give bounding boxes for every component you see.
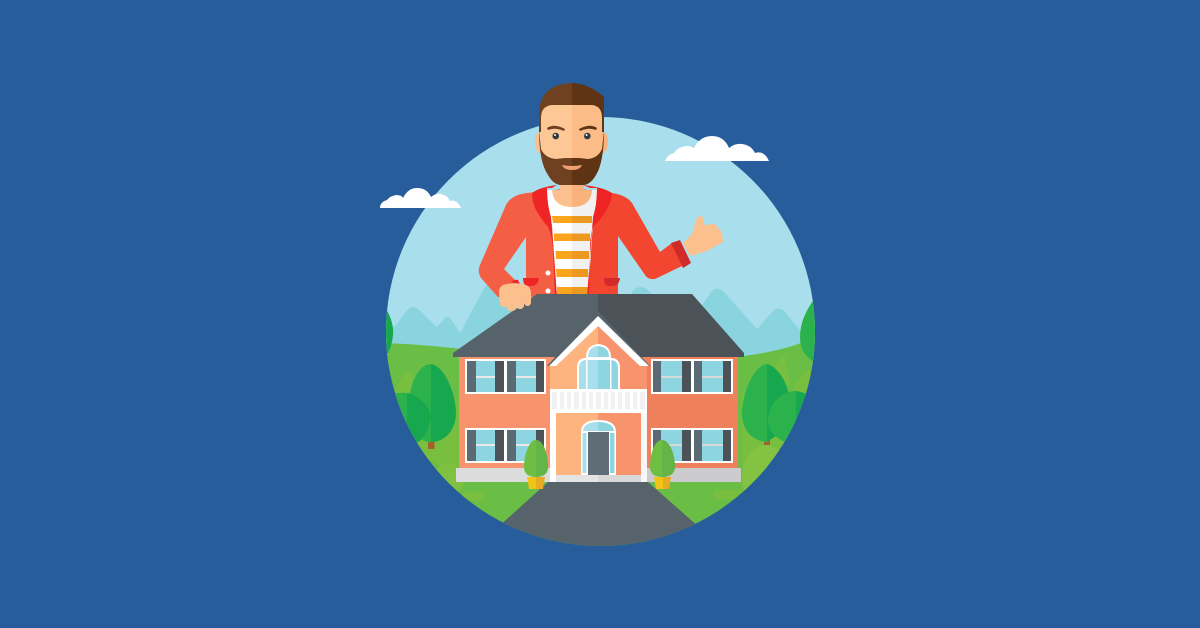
- person: [479, 132, 723, 297]
- eaves: [453, 353, 598, 357]
- house: [453, 294, 744, 489]
- hair: [539, 83, 572, 132]
- right edge tree: [800, 298, 815, 362]
- central gable outline: [547, 311, 650, 366]
- cloud right: [665, 136, 769, 161]
- hood left: [532, 185, 557, 297]
- pockets: [523, 278, 539, 286]
- eyebrows: [547, 126, 565, 131]
- foundation: [456, 468, 598, 482]
- mouth: [562, 165, 582, 170]
- thumbs up hand: [683, 216, 723, 256]
- shirt stripes: [552, 216, 592, 295]
- neck: [552, 180, 572, 207]
- windows left upper: [465, 359, 546, 394]
- beard: [539, 130, 572, 185]
- illustration: homeowner giving thumbs up above his house: [380, 83, 815, 546]
- ears: [535, 132, 541, 154]
- sky: [380, 110, 820, 360]
- hood right: [583, 185, 612, 297]
- left hand on roof: [499, 283, 531, 311]
- eyes: [552, 133, 559, 139]
- roof: [453, 294, 598, 353]
- ground: [380, 335, 820, 560]
- driveway: [503, 482, 696, 546]
- ground light patches: [380, 355, 815, 501]
- walls: [459, 357, 598, 469]
- entrance wall: [556, 413, 598, 475]
- door: [588, 432, 609, 475]
- mountains: [380, 284, 820, 370]
- right tree front: [768, 391, 806, 442]
- door frame and glass: [581, 420, 616, 475]
- jacket left: [479, 188, 572, 297]
- scene circle: [380, 110, 820, 560]
- left tree front: [395, 392, 431, 443]
- cloud left: [380, 188, 461, 208]
- head: [539, 83, 604, 185]
- face: [540, 105, 572, 165]
- bushes: [742, 445, 779, 491]
- arched window: [577, 344, 620, 389]
- left edge tree: [386, 309, 393, 356]
- balcony: [550, 389, 647, 413]
- pillars: [550, 413, 556, 482]
- windows right upper: [651, 359, 733, 394]
- central upper wall: [550, 325, 598, 392]
- windows left lower: [465, 428, 546, 463]
- left plant: [524, 440, 548, 489]
- windows right lower: [651, 428, 733, 463]
- cuff right: [671, 240, 691, 268]
- steps: [556, 475, 598, 482]
- jacket right: [572, 188, 682, 297]
- cuff left: [511, 280, 520, 284]
- right tree back: [742, 364, 790, 445]
- buttons: [546, 270, 550, 276]
- shirt: [547, 190, 572, 297]
- right plant: [650, 440, 675, 489]
- left tree back: [408, 364, 456, 449]
- gable white trim: [549, 316, 649, 366]
